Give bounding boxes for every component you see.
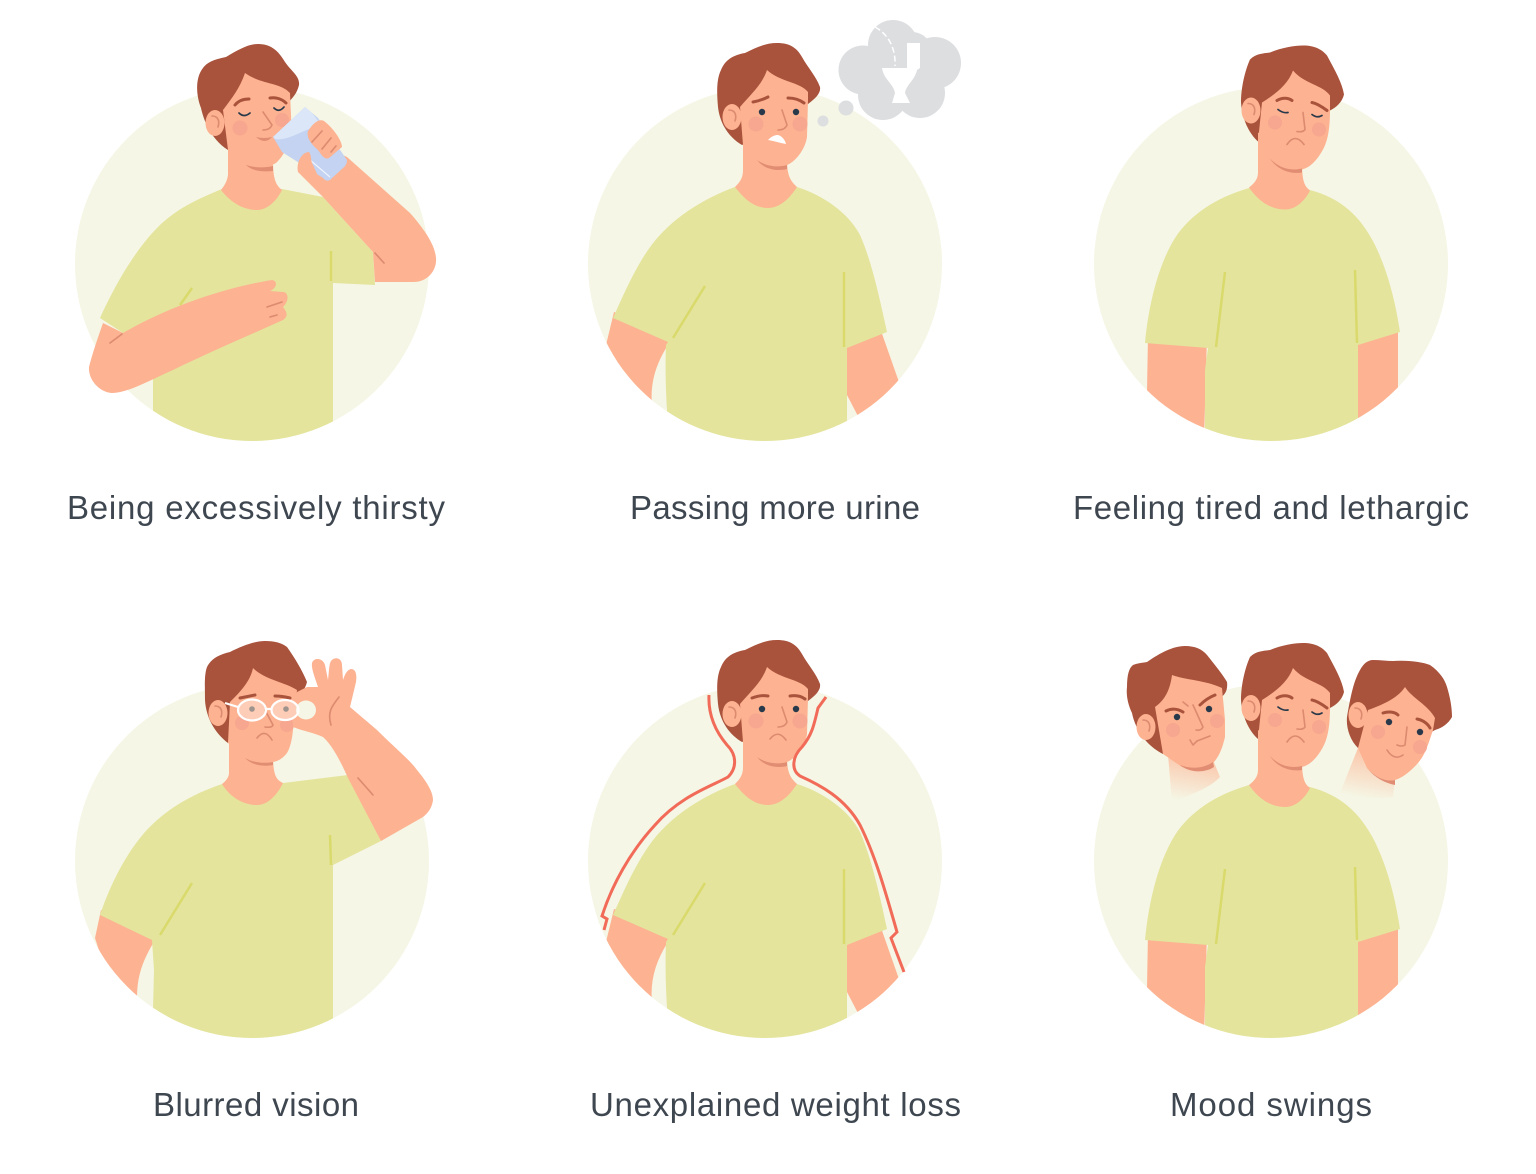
ear — [722, 104, 742, 130]
facial features — [748, 97, 808, 144]
neck — [221, 140, 282, 210]
facial features — [235, 695, 294, 740]
panel: feeling tired and lethargic — [1073, 46, 1469, 526]
arms and t-shirt — [1145, 785, 1400, 1038]
face — [223, 73, 291, 167]
panel: being excessively thirsty — [67, 44, 446, 526]
head — [1241, 46, 1344, 210]
hand creases — [330, 697, 373, 795]
caption: Passing more urine — [630, 489, 920, 526]
neck — [222, 735, 283, 805]
glasses — [225, 700, 298, 720]
background circle — [588, 684, 942, 1038]
t-shirt — [100, 189, 375, 460]
background circle — [1094, 87, 1448, 441]
hand holding glass — [298, 120, 384, 263]
left arm and t-shirt — [95, 775, 381, 1060]
hair — [717, 640, 820, 742]
happy head — [1340, 660, 1452, 798]
face — [740, 70, 808, 168]
ear — [722, 701, 742, 727]
raised arm — [298, 140, 436, 282]
face — [228, 668, 297, 763]
raised arm and hand — [293, 658, 433, 841]
thought bubble — [818, 20, 961, 126]
hair — [717, 43, 820, 145]
hair — [205, 641, 307, 743]
facial features — [232, 98, 289, 141]
caption: Mood swings — [1170, 1086, 1372, 1123]
silhouette halo — [606, 695, 896, 938]
caption: Feeling tired and lethargic — [1073, 489, 1469, 526]
lowered arm — [89, 280, 288, 393]
panel: blurred vision — [75, 641, 433, 1123]
facial features — [748, 696, 808, 740]
arm creases — [110, 302, 282, 343]
background circle — [75, 87, 429, 441]
caption: Unexplained weight loss — [590, 1086, 961, 1123]
neck shadow — [246, 165, 273, 171]
neck shadow — [245, 758, 273, 766]
arms and t-shirt — [606, 784, 898, 1038]
arms and t-shirt — [606, 187, 898, 441]
panel: passing more urine — [588, 20, 961, 526]
ear — [208, 700, 228, 726]
panel: mood swings — [1094, 643, 1452, 1123]
neck shadow — [757, 757, 787, 767]
arms and t-shirt — [1145, 188, 1400, 441]
background circle — [75, 684, 429, 1038]
hair — [197, 44, 299, 150]
sad centre head — [1241, 643, 1344, 807]
panel: unexplained weight loss — [588, 640, 961, 1123]
caption: Blurred vision — [153, 1086, 359, 1123]
face — [740, 667, 808, 765]
caption: Being excessively thirsty — [67, 489, 446, 526]
angry head — [1127, 646, 1227, 802]
neck — [735, 135, 797, 208]
background circle — [588, 87, 942, 441]
icon: toilet — [875, 27, 920, 103]
hand hole — [296, 700, 316, 720]
background circle — [1094, 684, 1448, 1038]
neck shadow — [757, 160, 787, 170]
neck — [735, 732, 797, 805]
glass of water — [273, 107, 347, 181]
ear — [206, 110, 224, 136]
weight loss outline — [602, 695, 904, 972]
